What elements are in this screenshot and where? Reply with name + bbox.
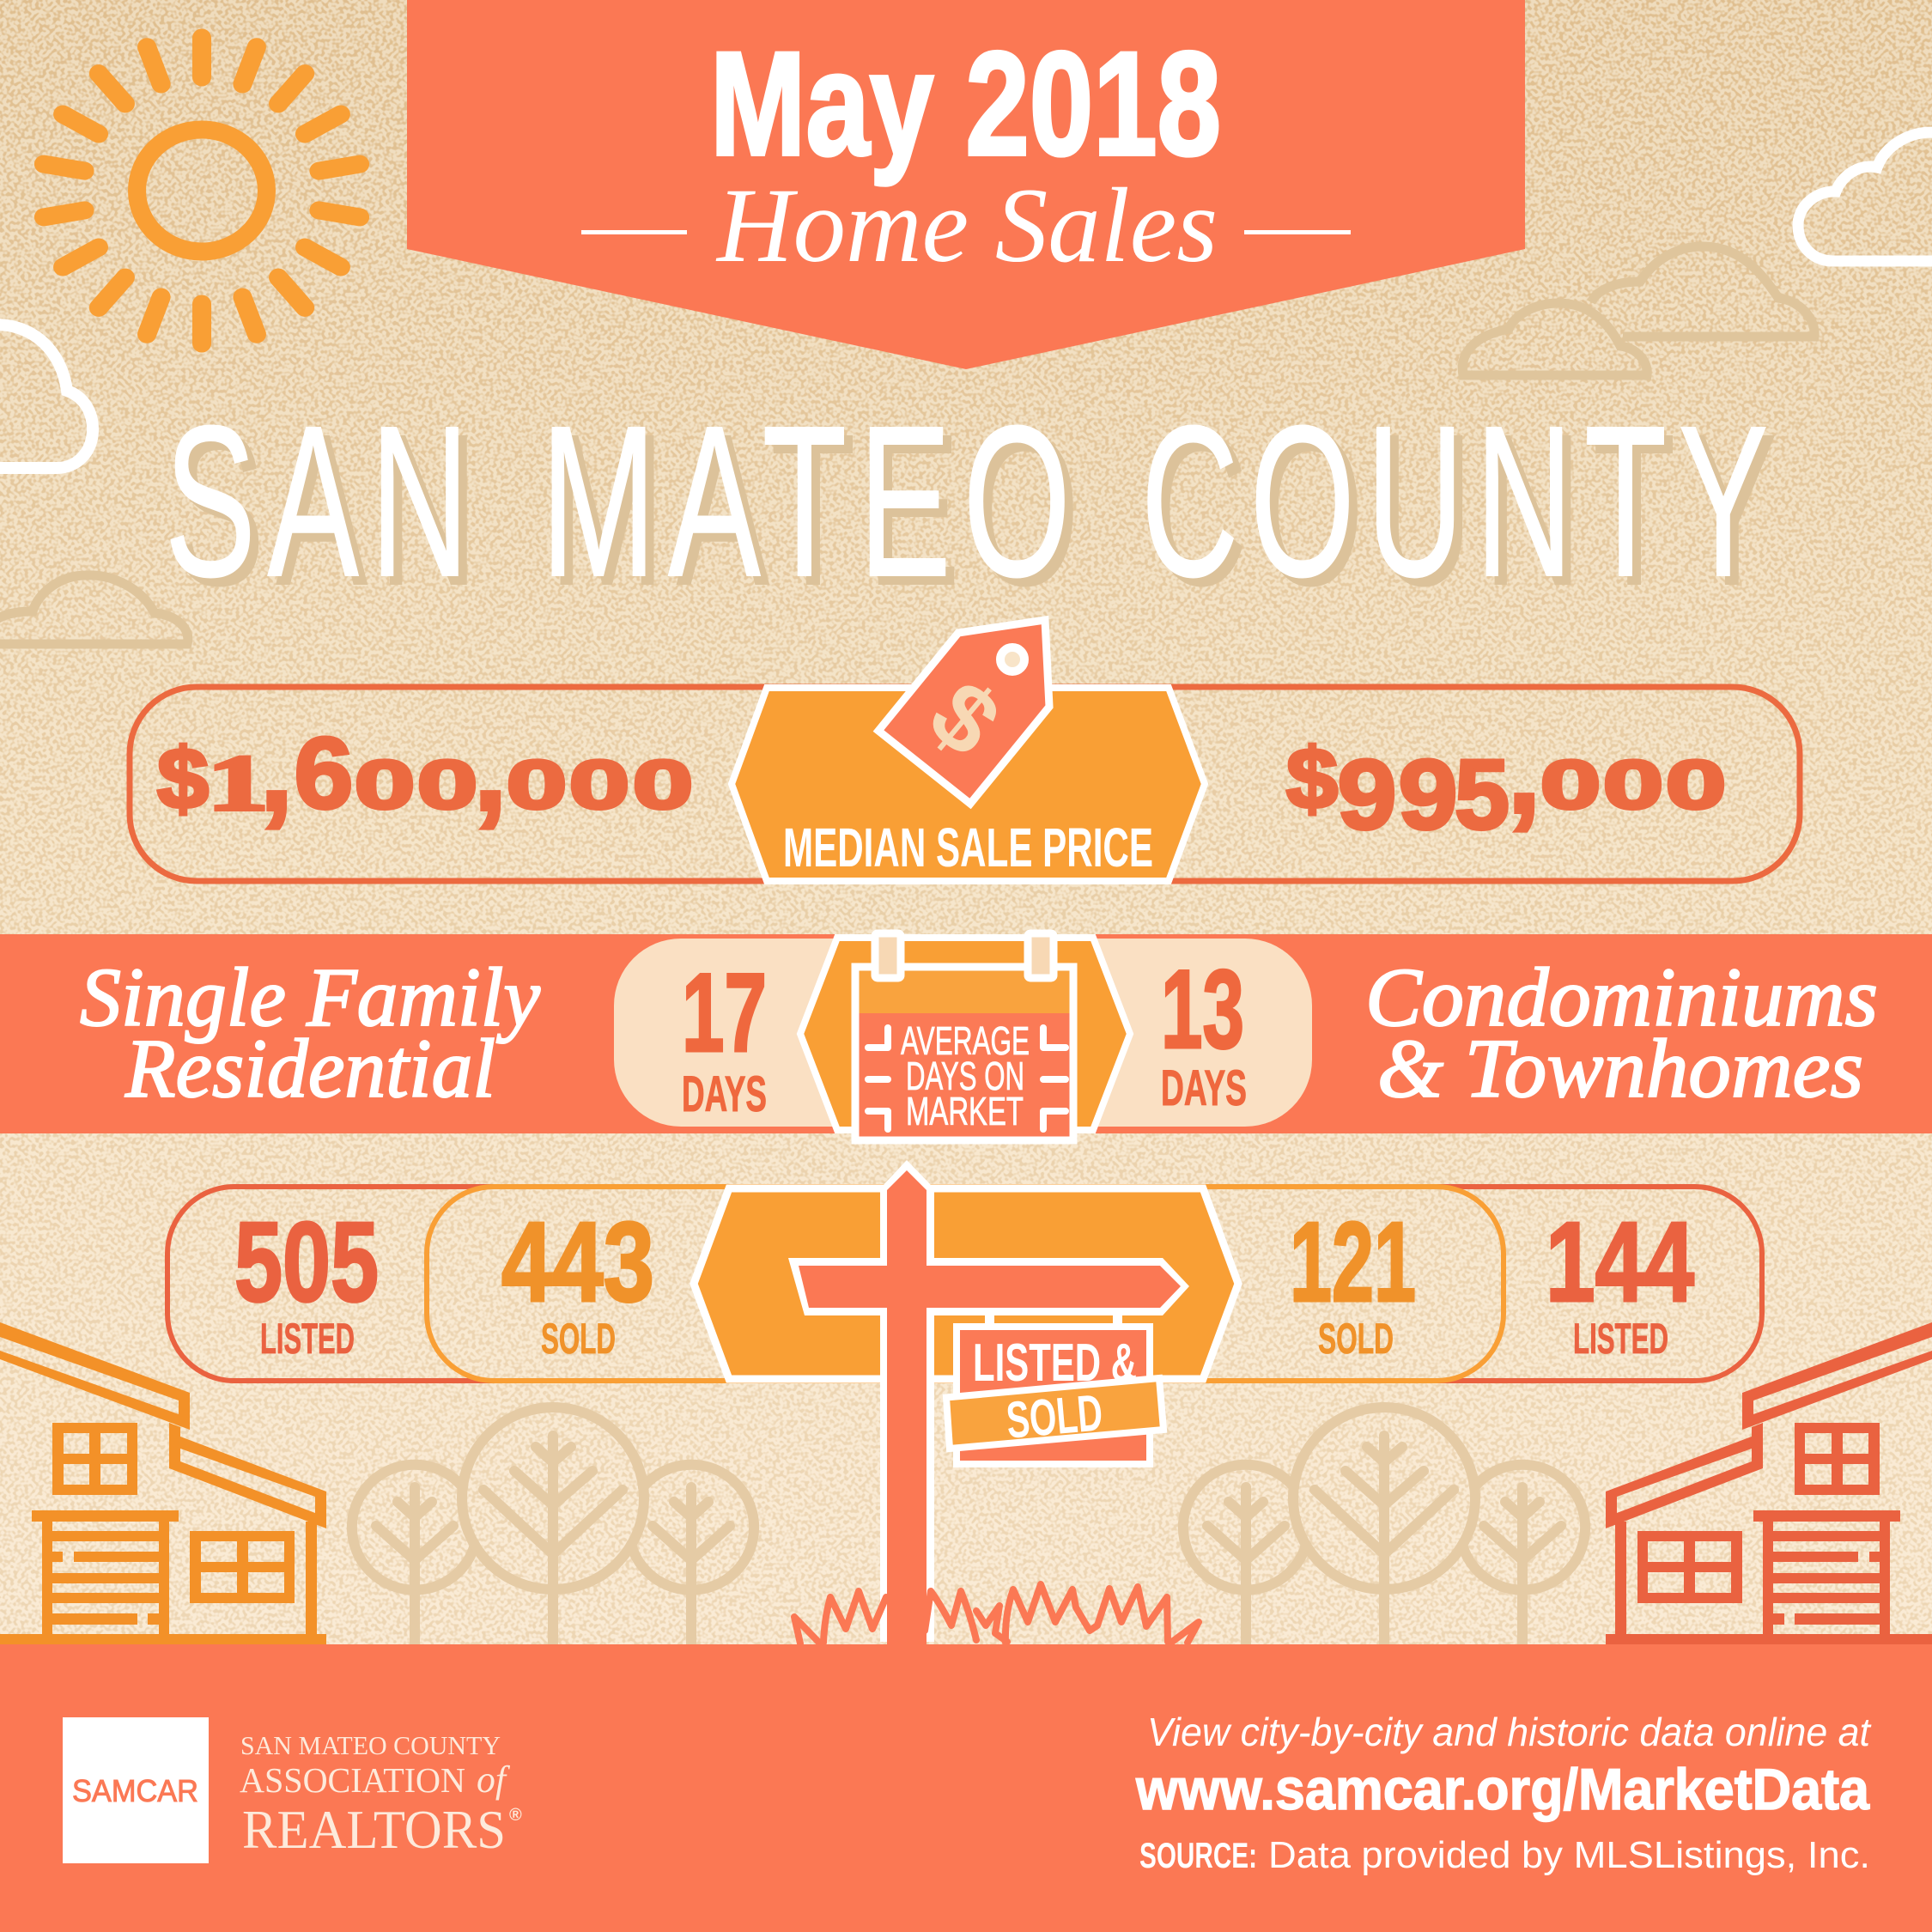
heading: San Mateo County: SAN — [165, 381, 481, 621]
price left: , — [474, 701, 507, 835]
label: condominiums and townhomes: & Townhomes — [1377, 1023, 1863, 1115]
price right: 9 — [1337, 740, 1397, 850]
logo: SAMCAR box — [63, 1717, 209, 1863]
arm — [799, 1266, 1181, 1308]
stat: 121 sold: SOLD — [1318, 1315, 1394, 1363]
band: property types and days on market — [0, 933, 1932, 1140]
icon: faint cloud upper back — [1591, 246, 1814, 337]
stat: 443 sold — [501, 1199, 654, 1363]
trees: right group — [1183, 1407, 1585, 1644]
heading: San Mateo County: MATEO — [550, 390, 1091, 629]
title: May 2018: May 2018 — [710, 21, 1221, 186]
hanging sign — [946, 1314, 1163, 1464]
price left: 0 — [507, 746, 567, 823]
icon: calendar — [855, 933, 1073, 1140]
price left: 0 — [355, 746, 415, 823]
hexagon — [732, 688, 1205, 881]
icon: grass — [794, 1584, 1199, 1643]
footer — [0, 1644, 1932, 1932]
icon: white cloud right — [1798, 132, 1932, 261]
stat: 13 days: DAYS — [1161, 1060, 1247, 1116]
icon: calendar: MARKET — [906, 1089, 1024, 1133]
stat: 443 sold: SOLD — [541, 1315, 616, 1363]
price left: $ — [157, 732, 209, 827]
subtitle dash right — [1244, 230, 1351, 234]
price left: 0 — [633, 746, 693, 823]
price left: 1 — [207, 739, 269, 828]
label: single family residential — [80, 951, 541, 1115]
price pill outline — [130, 687, 1800, 881]
trees: left group — [352, 1407, 754, 1644]
stat: 505 listed — [234, 1199, 379, 1363]
organisation name: REALTORS — [242, 1799, 506, 1860]
source note: Data provided by MLSListings, Inc. — [1268, 1834, 1870, 1876]
footer call to action: View city-by-city and historic data online at — [1147, 1710, 1872, 1754]
icon: house right — [1606, 1322, 1932, 1645]
stat: 505 listed: 505 — [234, 1199, 379, 1325]
stat: 121 sold — [1290, 1199, 1416, 1363]
icon: calendar: AVERAGE — [901, 1018, 1030, 1063]
header banner — [407, 0, 1525, 369]
stat: 144 listed: LISTED — [1573, 1315, 1668, 1363]
icon: house left — [0, 1322, 326, 1645]
label: single family residential: Single Family — [80, 951, 541, 1043]
label: single family residential: Residential — [125, 1023, 495, 1115]
stat: 144 listed — [1546, 1199, 1694, 1363]
heading: San Mateo County — [165, 381, 1789, 629]
price left: 0 — [417, 746, 477, 823]
icon: price tag — [878, 620, 1049, 804]
icon: faint cloud left — [0, 575, 188, 644]
sold pill outline — [427, 1187, 1504, 1381]
stat: 17 days — [682, 950, 767, 1122]
stat: 13 days: 13 — [1161, 946, 1244, 1072]
stat: 505 listed: LISTED — [260, 1315, 355, 1363]
panel: median sale price — [130, 620, 1800, 881]
stat: 121 sold: 121 — [1290, 1199, 1416, 1325]
price right: $ — [1286, 732, 1338, 827]
days pill — [614, 939, 1312, 1127]
icon: sun — [44, 38, 360, 343]
price right — [1286, 703, 1726, 850]
stat: 17 days: DAYS — [682, 1066, 767, 1122]
subtitle: Home Sales: Home Sales — [715, 167, 1218, 284]
price right: 5 — [1455, 740, 1510, 850]
price left — [157, 701, 693, 835]
price left: 0 — [569, 746, 629, 823]
heading: San Mateo County: SAN — [173, 390, 489, 629]
panel: listed and sold — [167, 1187, 1762, 1381]
icon: signpost — [788, 1160, 1189, 1644]
post — [887, 1170, 927, 1644]
hanging sign: LISTED & — [973, 1334, 1137, 1393]
price right: , — [1508, 703, 1540, 838]
price right: 9 — [1398, 740, 1458, 850]
footer url: www.samcar.org/MarketData — [1135, 1757, 1870, 1822]
organisation name: SAN MATEO COUNTY — [240, 1730, 501, 1760]
stat: 13 days — [1161, 946, 1247, 1116]
stat: 17 days: 17 — [682, 950, 767, 1075]
organisation name: ® — [509, 1806, 522, 1825]
label: condominiums and townhomes: Condominiums — [1365, 951, 1878, 1043]
subtitle dash left — [581, 230, 687, 234]
icon: price tag: $ — [910, 659, 1020, 776]
stat: 144 listed: 144 — [1546, 1199, 1694, 1325]
label: median sale price: MEDIAN SALE PRICE — [783, 817, 1153, 878]
arm outline — [788, 1258, 1189, 1315]
heading: San Mateo County: MATEO — [541, 381, 1083, 621]
organisation name: of — [477, 1759, 511, 1801]
hexagon — [800, 938, 1130, 1130]
price left: , — [260, 701, 293, 835]
icon: white cloud left — [0, 325, 93, 468]
icon: calendar: DAYS ON — [906, 1054, 1024, 1098]
hexagon — [694, 1188, 1238, 1379]
post outline — [880, 1160, 934, 1642]
listed pill outline — [167, 1187, 1762, 1381]
icon: faint cloud upper front — [1462, 303, 1647, 375]
label: condominiums and townhomes — [1365, 951, 1878, 1115]
price right: 0 — [1603, 746, 1663, 823]
hanging sign: SOLD — [1004, 1383, 1105, 1449]
source note: SOURCE: — [1139, 1835, 1257, 1875]
price right: 0 — [1666, 746, 1726, 823]
logo: SAMCAR box: SAMCAR — [72, 1773, 198, 1808]
price right: 0 — [1540, 746, 1601, 823]
stat: 443 sold: 443 — [501, 1199, 654, 1325]
price left: 6 — [295, 716, 353, 829]
organisation name: ASSOCIATION — [240, 1760, 465, 1800]
organisation name — [240, 1730, 522, 1860]
